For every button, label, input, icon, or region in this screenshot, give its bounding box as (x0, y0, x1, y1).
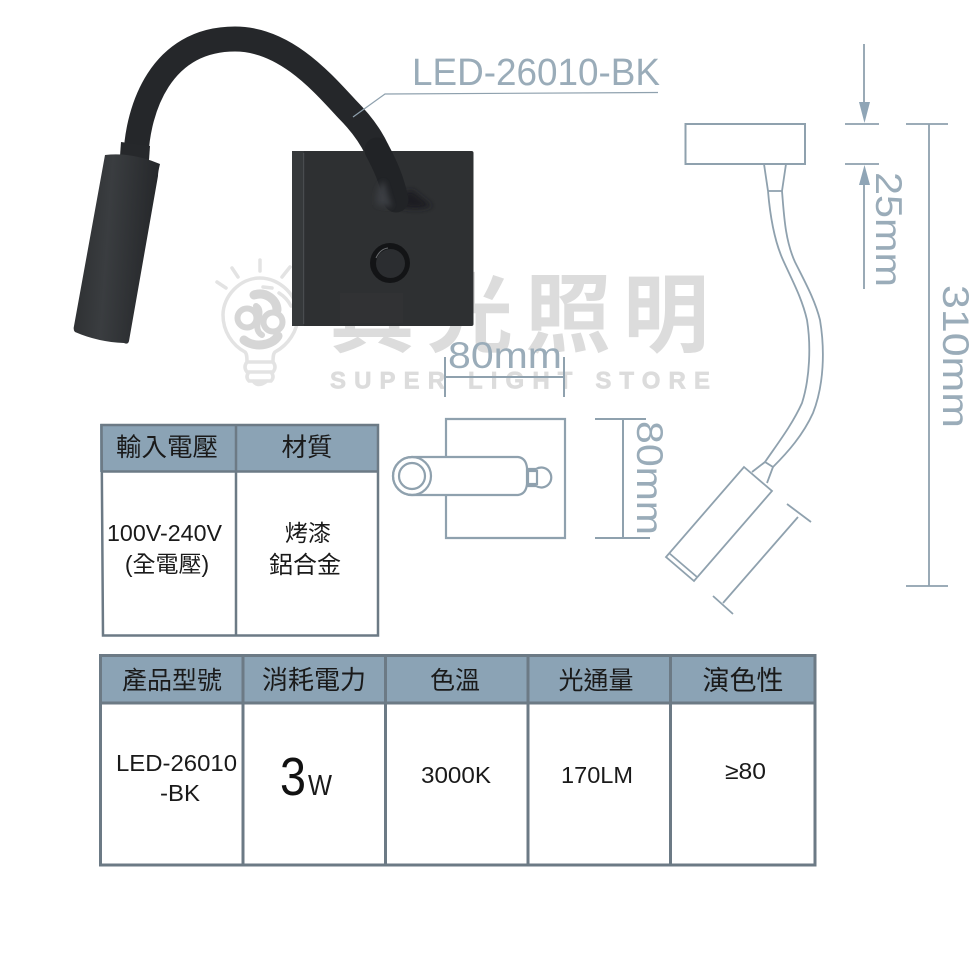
depth dimension arrows (845, 44, 879, 289)
icon: watermark light bulb (217, 260, 298, 384)
model label text: LED-26010-BK (412, 52, 660, 94)
header: colour rendering: 演色性 (702, 666, 784, 696)
header: material: 材質 (281, 434, 333, 462)
table: product specifications (100, 654, 816, 865)
value: model line 1: LED-26010 (116, 750, 237, 776)
value: wattage unit: W (308, 770, 333, 802)
lamp square base (292, 151, 474, 326)
front view drawing with dimensions (393, 335, 670, 538)
value: colour temperature: 3000K (421, 762, 492, 788)
callout: model label with leader line (353, 52, 660, 117)
table: input voltage and material (100, 424, 379, 636)
table 2 grid (100, 655, 815, 865)
side view drawing with dimensions (666, 44, 976, 614)
heading: watermark English name: SUPER LIGHT STORE (330, 368, 710, 394)
value: aluminium alloy: 鋁合金 (269, 552, 341, 579)
value: finish: 烤漆 (285, 520, 331, 546)
value: wattage: 3 (280, 747, 306, 807)
photo: black wall lamp (74, 39, 474, 344)
width dimension line (445, 357, 564, 397)
header: colour temperature: 色溫 (430, 667, 480, 695)
lamp arm over base (377, 150, 396, 200)
table 2 header band (100, 654, 816, 703)
value: full voltage note: (全電壓) (125, 551, 209, 577)
height dimension line (595, 419, 650, 538)
lamp dial button (370, 243, 410, 283)
header: power: 消耗電力 (262, 665, 366, 695)
watermark: bulb logo and store name (217, 260, 721, 394)
value: model line 2: -BK (160, 780, 201, 806)
value: luminous flux: 170LM (561, 762, 633, 788)
table 1 header band (100, 424, 379, 472)
table 1 grid (101, 425, 378, 636)
lamp arm shadow on base (382, 190, 432, 209)
header: luminous flux: 光通量 (558, 667, 634, 695)
total height dimension label: 310mm (935, 285, 976, 428)
lamp flexible arm (136, 39, 377, 155)
heading: watermark Chinese name: 真光照明 (329, 268, 721, 364)
lamp head collar (120, 142, 150, 160)
side view lamp outline (666, 124, 823, 614)
width dimension label: 80mm (448, 335, 562, 376)
logo swirl (238, 294, 282, 345)
value: voltage: 100V-240V (107, 520, 223, 546)
front view outline (393, 419, 565, 538)
value: colour rendering: ≥80 (725, 758, 766, 784)
total height dimension line (906, 124, 948, 586)
header: model: 產品型號 (122, 667, 222, 695)
leader line (353, 92, 658, 117)
height dimension label: 80mm (629, 421, 670, 535)
lamp cylindrical head (74, 154, 160, 344)
header: input voltage: 輸入電壓 (116, 434, 218, 462)
depth dimension label: 25mm (868, 172, 909, 287)
